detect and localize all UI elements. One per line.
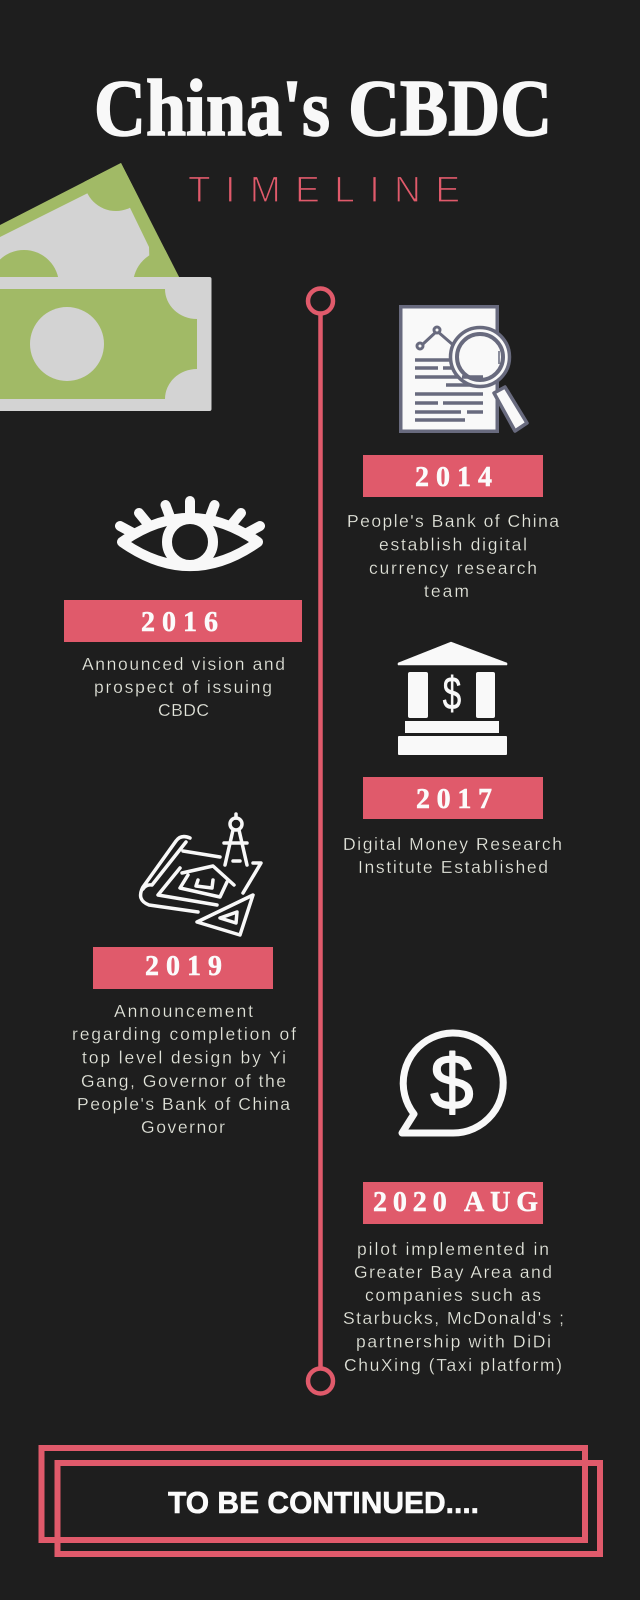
text: 2014 description: team bbox=[424, 581, 469, 601]
panel: 2016 bbox=[64, 501, 302, 720]
title: China's CBDC bbox=[94, 65, 552, 153]
year badge: 2017: 2017 bbox=[416, 784, 492, 815]
text: 2020 AUG description: partnership with DiDi bbox=[356, 1332, 551, 1352]
year badge: 2014 bbox=[363, 455, 543, 497]
panel: 2020 AUG bbox=[343, 1033, 564, 1375]
text: 2020 AUG description: companies such as bbox=[365, 1285, 541, 1305]
text: 2016 description: Announced vision and bbox=[82, 654, 285, 674]
text: 2020 AUG description bbox=[343, 1239, 564, 1375]
text: 2014 description: currency research bbox=[369, 558, 537, 578]
icon: blueprint with compass and set square bbox=[141, 814, 261, 935]
text: 2019 description: Governor bbox=[141, 1117, 225, 1137]
text: 2019 description: top level design by Yi bbox=[82, 1048, 286, 1068]
text: 2019 description: Announcement bbox=[114, 1001, 253, 1021]
year badge: 2017 bbox=[363, 777, 543, 819]
year badge: 2019 bbox=[93, 947, 273, 989]
year badge: 2016 bbox=[64, 600, 302, 642]
icon: banknotes bbox=[0, 147, 212, 411]
text: 2019 description: Gang, Governor of the bbox=[81, 1071, 286, 1091]
text: 2017 description bbox=[343, 834, 562, 877]
panel: 2019 bbox=[72, 814, 296, 1137]
text: 2019 description: regarding completion of bbox=[72, 1024, 296, 1044]
text: 2019 description bbox=[72, 1001, 296, 1137]
icon: speech bubble with dollar: $ bbox=[430, 1038, 474, 1126]
text: 2016 description bbox=[82, 654, 285, 720]
text: 2017 description: Digital Money Research bbox=[343, 834, 562, 854]
icon: document with magnifier bbox=[401, 307, 527, 431]
text: 2014 description: People's Bank of China bbox=[347, 511, 559, 531]
year badge: 2020 AUG bbox=[363, 1182, 543, 1224]
panel: 2017 bbox=[343, 642, 562, 877]
text: 2020 AUG description: ChuXing (Taxi platform) bbox=[344, 1355, 562, 1375]
year badge: 2014: 2014 bbox=[415, 462, 492, 493]
text: 2014 description: establish digital bbox=[379, 534, 527, 554]
callout: to be continued bbox=[42, 1448, 600, 1554]
text: 2016 description: prospect of issuing bbox=[94, 677, 272, 697]
icon: eye bbox=[120, 501, 260, 566]
icon: speech bubble with dollar bbox=[402, 1033, 503, 1133]
subtitle: timeline: TIMELINE bbox=[188, 169, 460, 210]
year badge: 2020 AUG: 2020 AUG bbox=[373, 1187, 538, 1218]
text: 2017 description: Institute Established bbox=[358, 857, 548, 877]
text: 2014 description bbox=[347, 511, 559, 601]
text: 2020 AUG description: Greater Bay Area and bbox=[354, 1262, 552, 1282]
year badge: 2019: 2019 bbox=[145, 951, 222, 982]
text: 2019 description: People's Bank of China bbox=[77, 1094, 290, 1114]
callout: to be continued: TO BE CONTINUED.... bbox=[168, 1485, 479, 1520]
year badge: 2016: 2016 bbox=[141, 607, 218, 638]
icon: bank: $ bbox=[443, 669, 461, 719]
text: 2020 AUG description: pilot implemented in bbox=[357, 1239, 549, 1259]
icon: bank bbox=[398, 642, 507, 755]
timeline line bbox=[308, 288, 333, 1394]
panel: 2014 bbox=[347, 307, 559, 601]
text: 2020 AUG description: Starbucks, McDonald's ; bbox=[343, 1308, 564, 1328]
text: 2016 description: CBDC bbox=[158, 700, 209, 720]
